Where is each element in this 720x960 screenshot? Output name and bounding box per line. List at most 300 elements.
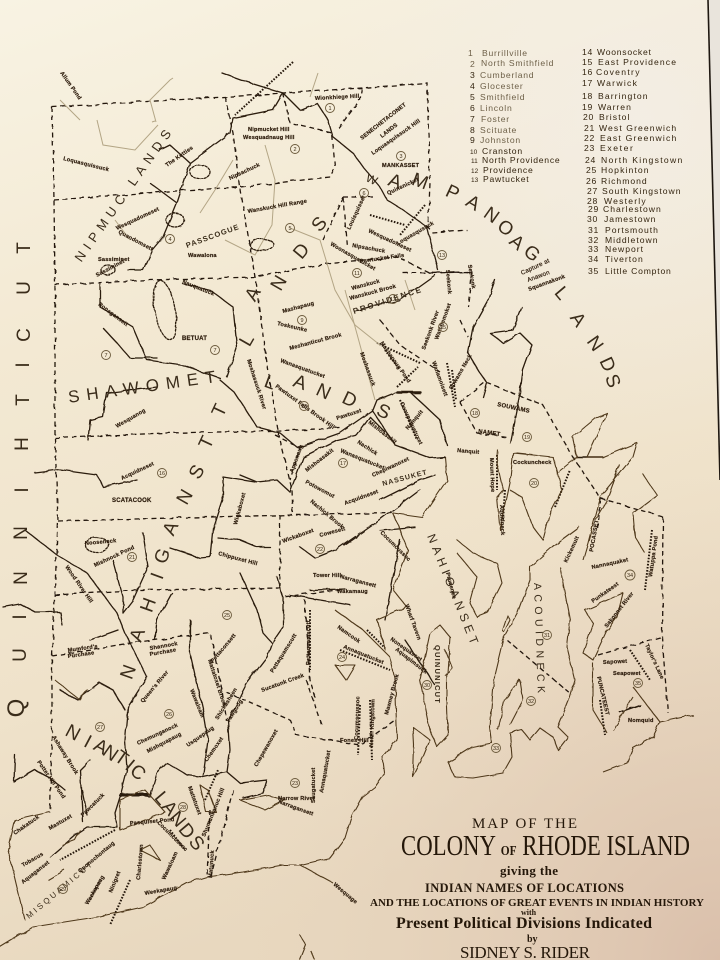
Wampanoag Lands lettering: N bbox=[480, 203, 503, 228]
tiny place names: Nipmucket Hill bbox=[248, 127, 290, 133]
circled town numbers: 9 bbox=[300, 318, 304, 324]
circled town numbers: 2 bbox=[293, 147, 297, 153]
tiny place names: Mumford's bbox=[67, 644, 98, 654]
tiny place names: Mawney Brook bbox=[384, 673, 401, 716]
tiny place names: Nannaquaket bbox=[591, 557, 629, 571]
legend column two: 34 bbox=[588, 254, 599, 264]
circled town numbers: 34 bbox=[627, 573, 633, 579]
tiny place names: Mishoasakit bbox=[367, 420, 397, 446]
tiny place names: Quandomsett bbox=[117, 229, 154, 253]
legend column two: East Providence bbox=[598, 57, 677, 67]
Niantic Lands lettering: N bbox=[62, 721, 84, 746]
legend column one: North Providence bbox=[482, 155, 560, 165]
Nahiganset lettering: G bbox=[150, 546, 175, 567]
tiny place names: Wanskuck Brook bbox=[349, 284, 398, 302]
tiny place names: Ninigret bbox=[108, 870, 122, 894]
tiny place names: Taylor's Lane bbox=[643, 643, 665, 680]
circled town numbers: 20 bbox=[531, 481, 537, 487]
tiny place names: Toskeunke bbox=[277, 321, 308, 334]
Wampanoag Lands lettering: A bbox=[385, 170, 405, 194]
tiny place names: Purchase bbox=[67, 650, 95, 660]
Quinnihticut lettering: N bbox=[11, 526, 32, 540]
Quinnihticut lettering: I bbox=[10, 614, 31, 620]
tiny place names: North Kingstown bbox=[369, 698, 377, 747]
legend column two: 26 bbox=[586, 176, 597, 186]
tiny place names: Wickaboxet bbox=[282, 528, 315, 545]
tiny place names: Charlestown bbox=[136, 844, 145, 880]
tiny place names: Nachick Brook bbox=[309, 499, 345, 531]
legend column two: 28 bbox=[587, 196, 598, 206]
legend column one: 5 bbox=[470, 92, 476, 102]
Nahiganset lettering: A bbox=[159, 518, 183, 539]
tiny place names: Tower Hill bbox=[313, 573, 342, 579]
Quinnihticut lettering bbox=[3, 242, 35, 717]
legend column one: Johnston bbox=[480, 135, 521, 145]
tiny place names: Loquasqusuck bbox=[396, 220, 436, 247]
tiny place names: Cocumcussoc bbox=[156, 820, 188, 853]
title block bbox=[370, 816, 704, 960]
Nahiganset lettering: N bbox=[117, 662, 141, 682]
tiny place names: The Ketties bbox=[165, 145, 195, 169]
tiny place names: Watchemoket bbox=[434, 303, 453, 341]
legend column two: Barrington bbox=[598, 91, 649, 101]
tiny place names: Quonochontaug bbox=[77, 840, 117, 875]
tiny place names: Nooseneck bbox=[85, 538, 117, 547]
legend column one: Cumberland bbox=[480, 70, 534, 80]
circled town numbers: 26 bbox=[166, 712, 172, 718]
legend column two: Warren bbox=[598, 102, 632, 112]
tiny place names: Prudence bbox=[444, 572, 457, 600]
legend column two: Bristol bbox=[599, 112, 631, 122]
legend column two: Charlestown bbox=[603, 204, 662, 214]
legend column two: South Kingstown bbox=[602, 186, 682, 196]
tiny place names: Cocumcussoc bbox=[379, 530, 411, 563]
legend column one: Glocester bbox=[480, 81, 524, 91]
tiny place names: NAMET bbox=[478, 429, 501, 438]
circled town numbers: 12 bbox=[390, 297, 396, 303]
tiny place names: Saugatucket bbox=[311, 768, 317, 803]
Niantic Lands lettering: N bbox=[99, 741, 122, 766]
circled town numbers: 31 bbox=[544, 633, 550, 639]
tiny place names: Cockuncheck bbox=[513, 460, 552, 466]
tiny place names: Pettaconsett bbox=[210, 633, 238, 664]
tiny place names: Sowams Neck bbox=[449, 353, 474, 391]
tiny place names: Pawcatuck bbox=[80, 792, 107, 818]
lower Lands lettering: D bbox=[339, 388, 360, 412]
tiny place names: Acquidneset bbox=[120, 461, 155, 482]
Nahiganset bay lettering: NAHIGANSET bbox=[424, 532, 483, 650]
tiny place names: Chemunganock bbox=[136, 722, 180, 747]
legend column one: Foster bbox=[481, 114, 510, 124]
tiny place names: Punkateest bbox=[591, 581, 620, 605]
subtitle: with: with bbox=[521, 908, 537, 917]
legend column two: Coventry bbox=[596, 67, 641, 77]
circled town numbers: 7 bbox=[104, 353, 108, 359]
tiny place names: Seapowet bbox=[613, 671, 641, 677]
Niantic Lands lettering: A bbox=[90, 735, 111, 760]
tiny place names: Shumunkanuc Hill bbox=[201, 787, 226, 838]
legend column two: 16 bbox=[582, 67, 593, 77]
circled town numbers: 16 bbox=[159, 471, 165, 477]
tiny place names: Mattatuxet bbox=[186, 786, 202, 816]
beaded place-name strokes bbox=[60, 62, 652, 925]
tiny place names: Annaquatucket bbox=[319, 750, 332, 793]
tiny place names: Sapowet bbox=[603, 659, 627, 666]
Nahiganset lettering: H bbox=[137, 595, 161, 615]
tiny place names: Potowomut bbox=[304, 479, 335, 500]
legend column one: North Smithfield bbox=[481, 58, 554, 68]
circled town numbers: 6 bbox=[362, 191, 366, 197]
Niantic Lands lettering: I bbox=[121, 756, 138, 776]
tiny place names: Seekonk bbox=[466, 264, 476, 290]
Nahiganset lettering bbox=[117, 401, 232, 682]
tiny place names: SENECHETACONET bbox=[360, 102, 408, 142]
tiny place names: Tobacus bbox=[21, 852, 45, 869]
upper Lands lettering bbox=[235, 213, 332, 350]
lower Lands lettering: S bbox=[373, 400, 394, 424]
legend column two: 35 bbox=[588, 266, 599, 276]
legend column one: Scituate bbox=[480, 125, 517, 135]
tiny place names: LANDS bbox=[380, 122, 399, 140]
tiny place names: Mashapaug Pond bbox=[378, 341, 412, 385]
tiny place names: Chakatuck bbox=[13, 814, 41, 837]
tiny place names: Chemoxet bbox=[204, 736, 225, 763]
tiny place names: Nipsachuck bbox=[228, 162, 262, 182]
tiny place names: Wesquadnaug Hill bbox=[243, 135, 295, 141]
legend column two: 22 bbox=[584, 133, 595, 143]
Niantic Lands lettering: N bbox=[165, 807, 190, 831]
legend column two: Little Compton bbox=[605, 266, 672, 276]
Niantic Lands lettering: D bbox=[174, 819, 199, 843]
tiny place names: BETUAT bbox=[182, 336, 207, 342]
lower Lands lettering bbox=[261, 371, 394, 424]
circled town numbers: 13 bbox=[439, 253, 445, 259]
lower Lands lettering: A bbox=[290, 371, 310, 395]
legend column two: 33 bbox=[588, 244, 599, 254]
tiny place names: Wanasquatucket bbox=[279, 358, 326, 380]
Quinnihticut lettering: N bbox=[11, 571, 32, 585]
tiny place names: Potter Hill Pond bbox=[35, 760, 66, 800]
upper Lands lettering: S bbox=[308, 213, 332, 236]
legend column one: Smithfield bbox=[480, 92, 525, 102]
tiny place names: Wesquadomeset bbox=[115, 207, 160, 232]
tiny place names: Aquapimsuck bbox=[394, 647, 429, 676]
tiny place names: POCASSET bbox=[589, 519, 601, 552]
Quinnihticut lettering: Q bbox=[3, 699, 30, 717]
tiny place names: Mattatoxet Brook bbox=[206, 659, 227, 708]
tiny place names: Wesquage bbox=[332, 882, 358, 905]
legend column two: 29 bbox=[588, 204, 599, 214]
tiny place names bbox=[13, 71, 665, 906]
legend of towns bbox=[468, 47, 684, 276]
tiny place names: Sakonnet River bbox=[604, 591, 636, 629]
Niantic Lands lettering: L bbox=[150, 788, 173, 809]
tiny place names: Moshassuck bbox=[358, 352, 376, 388]
tiny place names: Pettaquamscutt bbox=[306, 620, 312, 665]
legend column one: Burrillville bbox=[482, 48, 528, 58]
tiny place names: Mount Hope bbox=[488, 458, 495, 492]
legend column two: 19 bbox=[582, 102, 593, 112]
circled town numbers: 19 bbox=[524, 435, 530, 441]
tiny place names: Ashaway Brook bbox=[50, 735, 79, 776]
tiny place names: Wakamaug bbox=[337, 589, 368, 595]
legend column two: 17 bbox=[582, 78, 593, 88]
tiny place names: Woonasquatucket bbox=[329, 242, 376, 272]
upper Lands lettering: N bbox=[267, 272, 292, 294]
tiny place names: Wanamoisett bbox=[430, 361, 448, 397]
Nahiganset lettering: I bbox=[147, 570, 169, 582]
circled town numbers bbox=[58, 104, 642, 894]
subtitle: indian names of locations: INDIAN NAMES OF LOCATIONS bbox=[425, 881, 624, 895]
legend column two: 23 bbox=[584, 143, 595, 153]
tiny place names: Quinsnicket bbox=[386, 177, 420, 197]
Misquamicut lettering: MISQUAMICUT bbox=[25, 859, 96, 921]
tiny place names: Mashapaug bbox=[282, 301, 315, 315]
legend column one: 6 bbox=[470, 103, 476, 113]
tiny place names: Seekonk bbox=[444, 270, 452, 295]
upper Lands lettering: L bbox=[235, 330, 259, 350]
tiny place names: Ponagansett bbox=[97, 302, 129, 328]
dashed town boundaries bbox=[50, 83, 668, 880]
circled town numbers: 27 bbox=[97, 725, 103, 731]
Nahiganset lettering: T bbox=[195, 433, 219, 452]
tiny place names: Wanasquatucket bbox=[339, 448, 385, 471]
tiny place names: Loquasquissuck bbox=[63, 156, 110, 173]
tiny place names: Moshassuck River bbox=[245, 359, 267, 411]
tiny place names: Mishoasakit bbox=[305, 448, 335, 474]
circled town numbers: 18 bbox=[472, 411, 478, 417]
tiny place names: Pawtucket Falls bbox=[359, 253, 405, 265]
legend column two: East Greenwich bbox=[600, 133, 677, 143]
large tribal land names bbox=[3, 122, 624, 921]
legend column two: Hopkinton bbox=[601, 165, 650, 175]
tiny place names: Namcook bbox=[336, 625, 362, 645]
tiny place names: Wesquanog bbox=[115, 408, 147, 430]
Wampanoag Lands lettering: A bbox=[565, 309, 590, 331]
Wampanoag Lands lettering: O bbox=[493, 216, 517, 241]
tiny place names: Meshanticut Brook bbox=[289, 332, 343, 352]
legend column two: North Kingstown bbox=[601, 155, 684, 165]
legend column one: Lincoln bbox=[480, 103, 512, 113]
legend column two: 21 bbox=[584, 123, 595, 133]
circled town numbers: 32 bbox=[528, 699, 534, 705]
tiny place names: Pawtuxet Falls Brook Hill bbox=[274, 384, 336, 431]
legend column two: Portsmouth bbox=[605, 225, 659, 235]
tiny place names: Queen's River bbox=[140, 669, 171, 704]
legend column one: 7 bbox=[470, 114, 476, 124]
tiny place names: Chepewanoxet bbox=[254, 729, 280, 768]
tiny place names: PUNCATEEST bbox=[595, 676, 610, 716]
legend column two: 20 bbox=[583, 112, 594, 122]
Quinnihticut lettering: U bbox=[10, 648, 31, 662]
legend column one bbox=[468, 48, 560, 184]
tiny place names: Wharf Tavern bbox=[403, 604, 422, 641]
circled town numbers: 28 bbox=[180, 805, 186, 811]
tiny place names: Wanskuck Hill Range bbox=[247, 199, 308, 215]
tiny place names: SCATACOOK bbox=[112, 498, 152, 504]
Wampanoag Lands lettering: W bbox=[364, 171, 380, 188]
legend column one: 2 bbox=[470, 59, 476, 69]
Quinnihticut lettering: C bbox=[14, 328, 35, 342]
circled town numbers: 5 bbox=[288, 226, 292, 232]
legend column two: West Greenwich bbox=[599, 123, 677, 133]
Wampanoag Lands lettering: N bbox=[582, 332, 607, 355]
legend column two: Exeter bbox=[600, 143, 634, 153]
legend column one: 12 bbox=[471, 168, 479, 175]
upper Lands lettering: A bbox=[241, 283, 266, 305]
legend column one: Pawtucket bbox=[483, 174, 529, 184]
tiny place names: Fones Hill bbox=[340, 738, 369, 744]
Wampanoag Lands lettering: S bbox=[600, 372, 624, 391]
tiny place names: Sucatunk Creek bbox=[261, 673, 306, 694]
Quinnihticut lettering: T bbox=[13, 394, 34, 406]
tiny place names: Wesquadomeset bbox=[367, 228, 412, 254]
Shawomet lettering: SHAWOMET bbox=[67, 366, 224, 407]
tiny place names: Allum Pond bbox=[58, 71, 82, 102]
tiny place names: Capture at bbox=[520, 257, 551, 277]
circled town numbers: 15 bbox=[440, 325, 446, 331]
rivers and streams bbox=[3, 73, 640, 857]
legend column one: 13 bbox=[471, 177, 479, 184]
tiny place names: Nonequasset bbox=[389, 637, 423, 663]
Wampanoag Lands lettering: G bbox=[519, 241, 544, 267]
tiny place names: Wionkhiege Hill bbox=[315, 94, 360, 102]
tiny place names: Narragansett bbox=[277, 799, 314, 818]
Wampanoag Lands lettering: A bbox=[462, 191, 484, 216]
Niantic Lands lettering bbox=[62, 721, 208, 855]
legend column two: Warwick bbox=[597, 78, 638, 88]
legend column one: 4 bbox=[470, 81, 476, 91]
tiny place names: Narragansett bbox=[339, 574, 377, 589]
tiny place names: Mishquapaug bbox=[146, 731, 183, 755]
lower Lands lettering: L bbox=[261, 371, 278, 395]
tiny place names: Nomquid bbox=[628, 718, 654, 724]
Wampanoag Lands lettering: M bbox=[409, 169, 431, 194]
tiny place names: Usquepaug bbox=[186, 725, 216, 749]
tiny place names: Nipsachuck bbox=[352, 243, 386, 255]
Quinnihticut lettering: H bbox=[12, 437, 33, 451]
legend column two: 15 bbox=[582, 57, 593, 67]
legend column two: Middletown bbox=[605, 235, 658, 245]
Wampanoag Lands lettering: P bbox=[442, 181, 463, 205]
title line: colony of rhode island: COLONY OF RHODE ISLAND bbox=[401, 831, 690, 862]
tiny place names: Wawaloam bbox=[161, 851, 180, 881]
legend column two: Woonsocket bbox=[597, 47, 652, 57]
tiny place names: Mastuxet bbox=[48, 814, 73, 832]
Quinnihticut lettering: T bbox=[14, 242, 35, 254]
tiny place names: Wawaloam bbox=[188, 689, 205, 719]
legend column two: 27 bbox=[587, 186, 598, 196]
tiny place names: Mishnock Pond bbox=[93, 545, 136, 569]
Nassuket lettering: NASSUKET bbox=[382, 469, 428, 488]
legend column two: Richmond bbox=[601, 176, 648, 186]
Providence lettering: PROVIDENCE bbox=[352, 285, 424, 316]
tiny place names: Wawalona bbox=[188, 253, 217, 259]
legend column two: Jamestown bbox=[604, 214, 656, 224]
circled town numbers: 33 bbox=[493, 746, 499, 752]
Nahiganset lettering: N bbox=[173, 486, 198, 508]
tiny place names: Matunuck bbox=[208, 849, 216, 878]
circled town numbers: 21 bbox=[129, 555, 135, 561]
legend column one: 3 bbox=[470, 70, 476, 80]
tiny place names: Weekapaug bbox=[144, 885, 178, 897]
tiny place names: Aquaganset bbox=[21, 860, 51, 886]
page edge line bbox=[708, 0, 720, 480]
subtitle: locations of great events: AND THE LOCATIONS OF GREAT EVENTS IN INDIAN HISTORY bbox=[370, 898, 704, 909]
tiny place names: Louisquisset bbox=[346, 195, 367, 231]
tiny place names: Shannock bbox=[149, 641, 179, 652]
tiny place names: Sassiminet bbox=[98, 257, 130, 263]
tiny place names: Seekonk River bbox=[421, 309, 441, 351]
Quinnihticut lettering: U bbox=[14, 281, 35, 295]
tiny place names: Yawgoog bbox=[226, 699, 245, 724]
legend column one: 9 bbox=[470, 135, 476, 145]
Nipmuc Lands lettering: NIPMUC LANDS bbox=[71, 122, 177, 265]
legend column one: 8 bbox=[470, 125, 476, 135]
tiny place names: Cowesett bbox=[319, 526, 346, 539]
tiny place names: Squannakonk bbox=[528, 274, 567, 293]
lower Lands lettering: N bbox=[313, 380, 334, 404]
tiny place names: Pettaquamscutt bbox=[270, 633, 298, 674]
Niantic Lands lettering: I bbox=[80, 732, 95, 753]
legend column one: 10 bbox=[470, 149, 478, 156]
Niantic Lands lettering: C bbox=[126, 760, 150, 785]
legend column two: Newport bbox=[605, 244, 644, 254]
legend column one: 11 bbox=[471, 158, 478, 165]
legend column two bbox=[582, 47, 684, 276]
legend column two: 30 bbox=[587, 214, 598, 224]
tiny place names: Sassiminet bbox=[95, 259, 126, 279]
tiny place names: Acquidneset bbox=[344, 489, 379, 507]
circled town numbers: 30 bbox=[424, 683, 430, 689]
title line: map of the: MAP OF THE bbox=[472, 816, 577, 832]
lakes and ponds bbox=[85, 165, 274, 552]
circled town numbers: 4 bbox=[168, 237, 172, 243]
faint tributaries bbox=[60, 73, 415, 400]
circled town numbers: 17 bbox=[340, 461, 346, 467]
upper Lands lettering: D bbox=[289, 239, 314, 263]
Quinnihticut lettering: I bbox=[13, 362, 34, 368]
tiny place names: Nachick bbox=[356, 440, 379, 458]
circled town numbers: 3 bbox=[399, 154, 403, 160]
circled town numbers: 7 bbox=[213, 348, 217, 354]
circled town numbers: 10 bbox=[301, 404, 307, 410]
tiny place names: Cocumscussoc bbox=[354, 696, 362, 740]
tiny place names: Watuppa Pond bbox=[648, 535, 660, 577]
Quinnihticut lettering: I bbox=[12, 487, 33, 493]
circled town numbers: 25 bbox=[224, 613, 230, 619]
tiny place names: Aquidneck bbox=[498, 505, 505, 536]
Nahiganset lettering: A bbox=[126, 625, 150, 645]
subtitle: present political divisions: Present Political Divisions Indicated bbox=[396, 915, 652, 932]
tiny place names: Pawtuxet bbox=[336, 408, 363, 422]
Niantic Lands lettering: T bbox=[110, 747, 132, 771]
tiny place names: SOUWAMS bbox=[497, 402, 530, 415]
circled town numbers: 22 bbox=[317, 547, 323, 553]
tiny place names: Wickaboxet bbox=[233, 492, 247, 526]
tiny place names: Nanquit bbox=[457, 448, 479, 456]
Nahiganset lettering: S bbox=[185, 462, 210, 483]
circled town numbers: 24 bbox=[339, 655, 345, 661]
tiny place names: MANKASSET bbox=[382, 163, 420, 169]
Acouidneck lettering: ACOUIDNECK bbox=[531, 583, 547, 695]
tiny place names: Nauquatuck bbox=[181, 279, 216, 298]
tiny place names: Narrow River bbox=[278, 796, 316, 802]
Niantic Lands lettering: A bbox=[157, 797, 182, 820]
Nahiganset lettering: T bbox=[208, 401, 232, 420]
legend column two: 25 bbox=[586, 165, 597, 175]
subtitle: by: by bbox=[527, 934, 538, 945]
